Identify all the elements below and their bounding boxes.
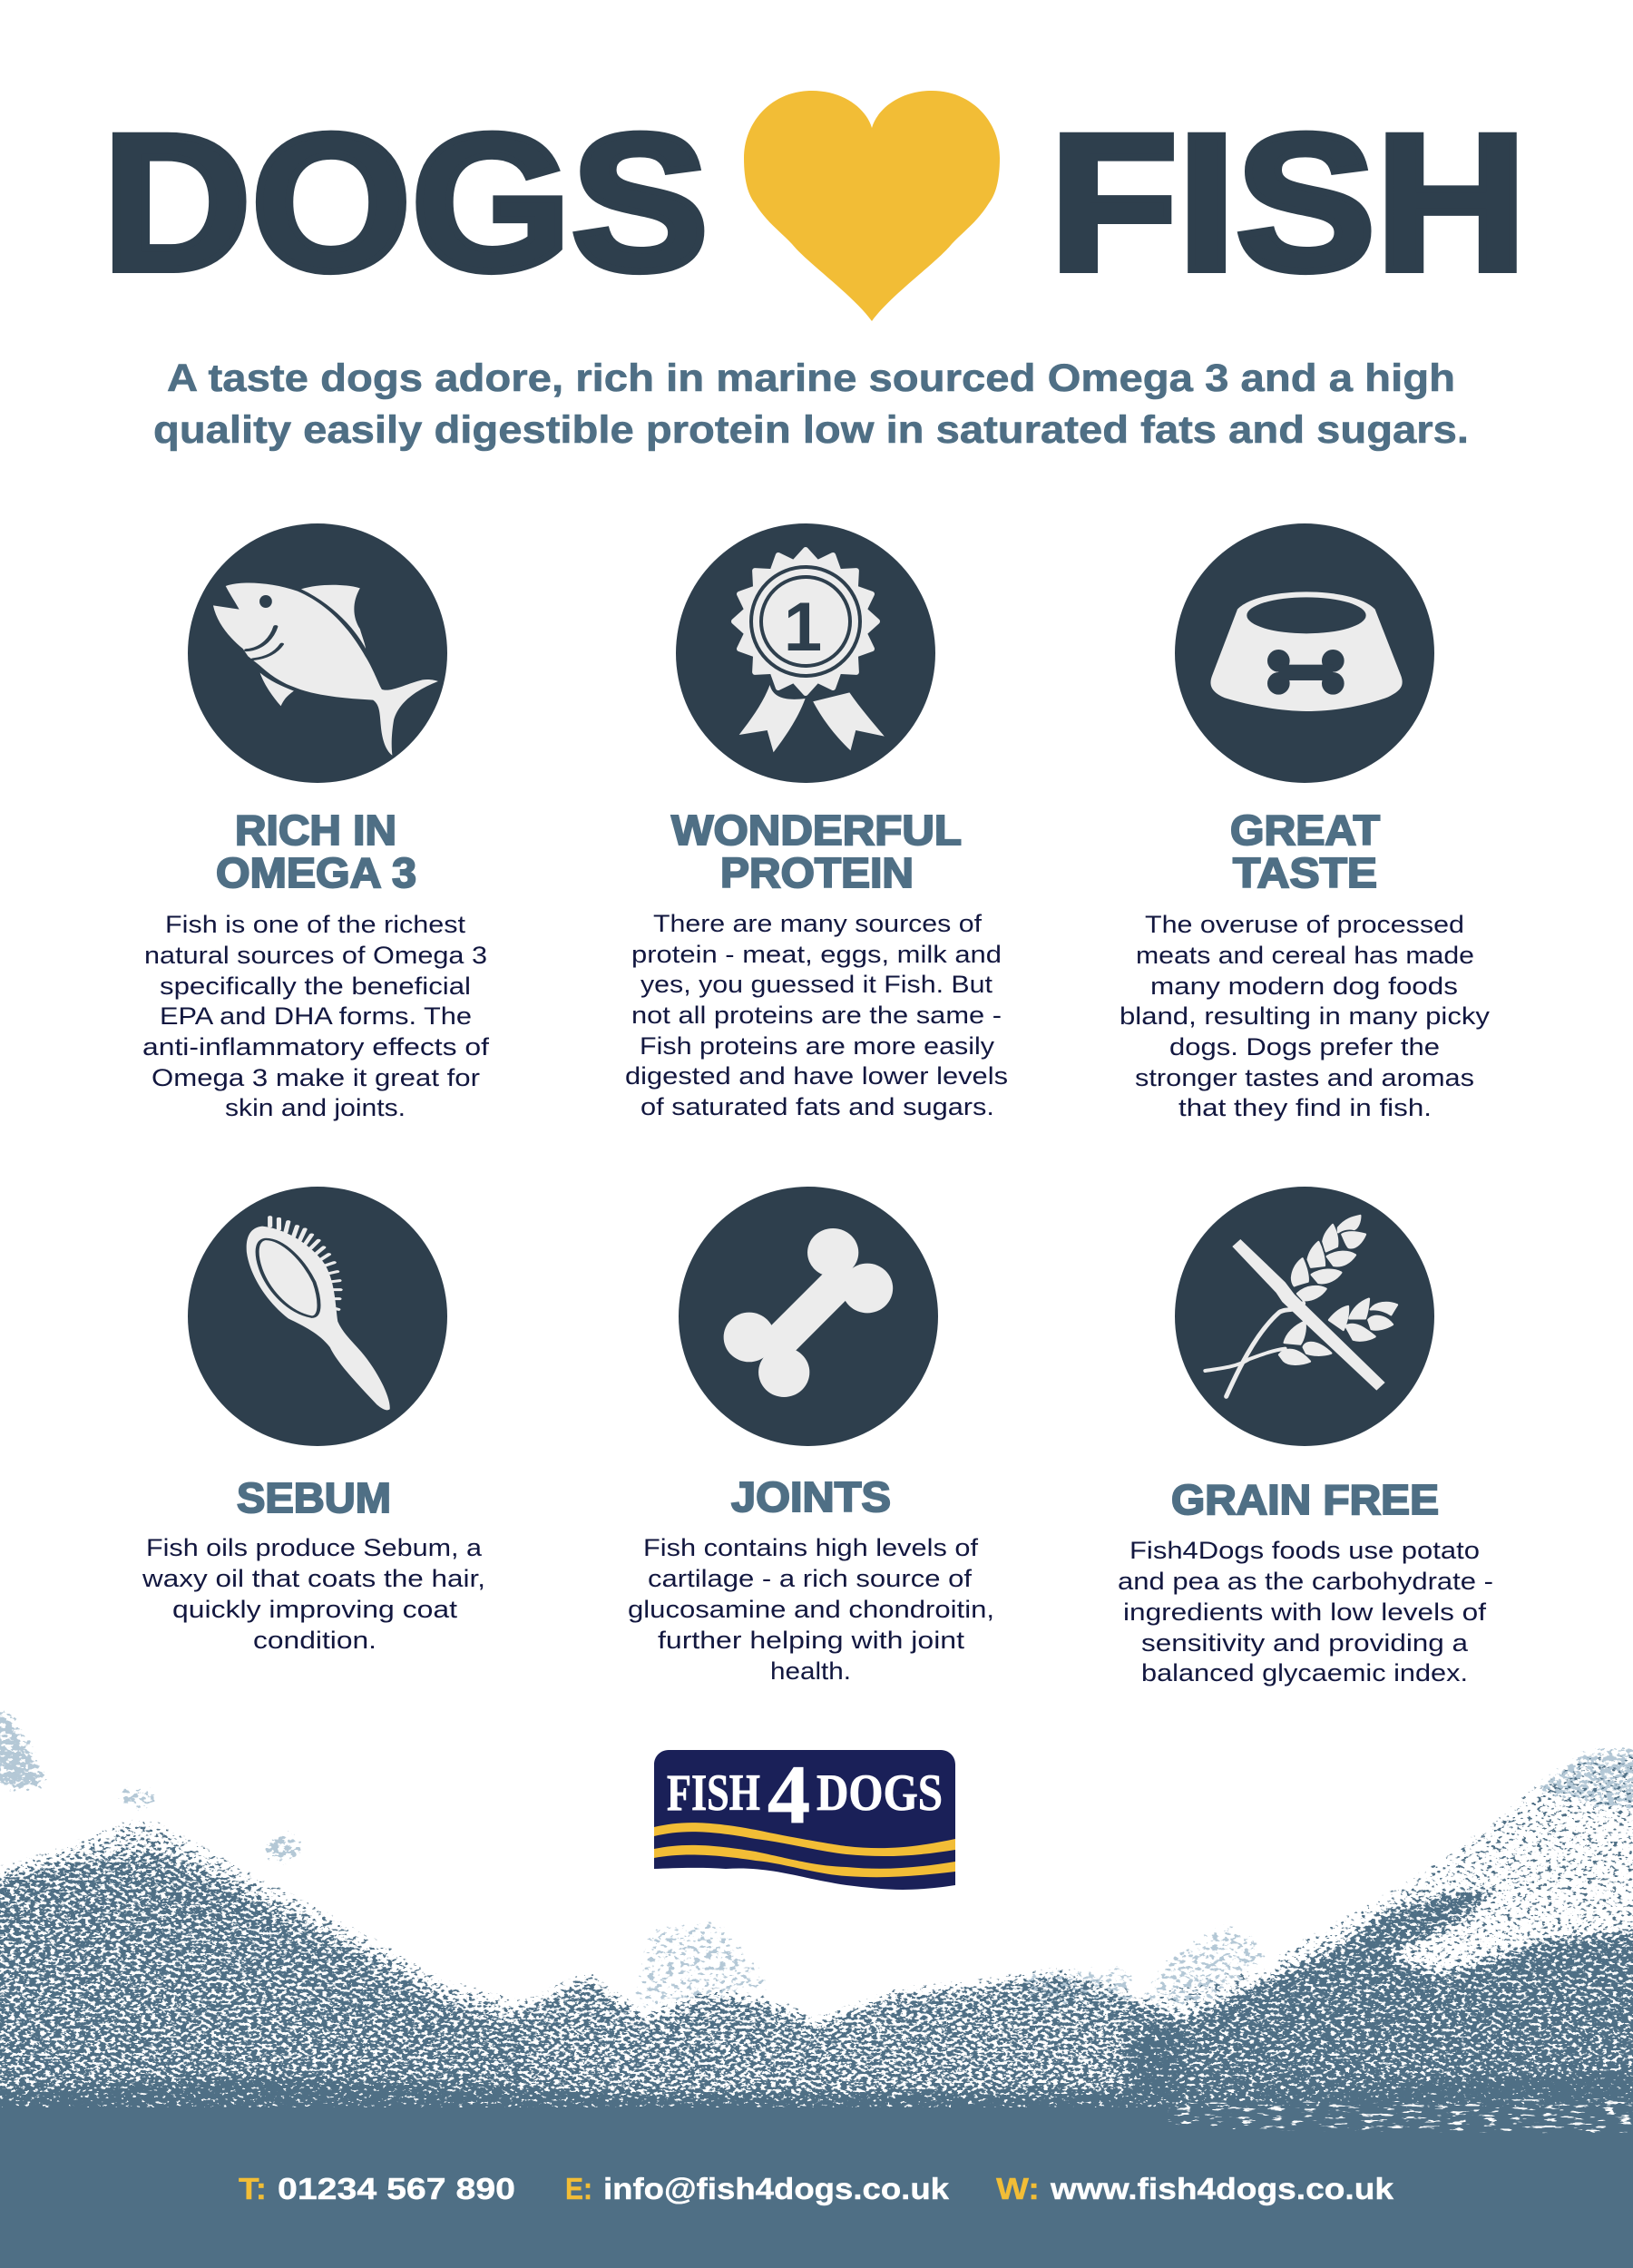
water speckles [1170, 2100, 1633, 2132]
panel: sebum [142, 1187, 485, 1654]
body text: taste: bland, resulting in many picky [1120, 1002, 1491, 1030]
body text: taste: The overuse of processed [1145, 911, 1464, 938]
body text: sebum [142, 1534, 485, 1654]
icon: fish [188, 523, 447, 783]
panel: rich in omega 3 [142, 523, 490, 1121]
body text: grain free: ingredients with low levels of [1123, 1598, 1487, 1626]
icon: dog bowl [1175, 523, 1434, 783]
subtitle: A taste dogs adore, rich in marine sourced Omega 3 and a high [167, 357, 1455, 400]
panel: grain free [1118, 1187, 1493, 1686]
body text: omega 3 [142, 911, 490, 1121]
logo: fish4dogs [654, 1748, 955, 1890]
body text: grain free: Fish4Dogs foods use potato [1129, 1537, 1480, 1564]
body text: taste: many modern dog foods [1150, 973, 1458, 1000]
panel: joints [628, 1187, 994, 1685]
body text: taste: dogs. Dogs prefer the [1169, 1033, 1440, 1061]
phone: 01234 567 890 [278, 2172, 515, 2205]
body text: sebum: quickly improving coat [172, 1596, 458, 1623]
body text: omega 3: specifically the beneficial [160, 973, 471, 1000]
body text: protein: protein - meat, eggs, milk and [631, 941, 1002, 968]
body text: omega 3: Fish is one of the richest [165, 911, 466, 938]
contact details [239, 2172, 1394, 2205]
body text: joints: glucosamine and chondroitin, [628, 1596, 994, 1623]
heading: rich in omega 3: OMEGA 3 [216, 849, 416, 896]
website: W: [996, 2172, 1040, 2205]
heading: great taste: GREAT [1230, 807, 1380, 854]
body text: protein: of saturated fats and sugars. [640, 1093, 994, 1120]
body text: grain free: balanced glycaemic index. [1141, 1659, 1468, 1686]
heading: rich in omega 3 [216, 807, 416, 896]
body text: omega 3: natural sources of Omega 3 [144, 942, 487, 969]
body text: protein [625, 910, 1008, 1120]
title: dogs heart fish [103, 91, 1527, 321]
body text: omega 3: anti-inflammatory effects of [142, 1033, 490, 1061]
icon: bone [679, 1187, 938, 1446]
heading: great taste: TASTE [1233, 849, 1377, 896]
body text: taste: that they find in fish. [1178, 1094, 1432, 1121]
email: info@fish4dogs.co.uk [603, 2172, 950, 2205]
panel: wonderful protein [625, 523, 1008, 1120]
website: www.fish4dogs.co.uk [1050, 2172, 1394, 2205]
body text: protein: digested and have lower levels [625, 1062, 1008, 1090]
body text: taste [1120, 911, 1491, 1121]
body text: taste: meats and cereal has made [1136, 942, 1474, 969]
body text: joints: Fish contains high levels of [643, 1534, 979, 1561]
phone: T: [239, 2172, 267, 2205]
body text: joints: cartilage - a rich source of [648, 1565, 973, 1592]
body text: omega 3: EPA and DHA forms. The [160, 1002, 472, 1030]
body text: grain free: and pea as the carbohydrate - [1118, 1568, 1493, 1595]
title word: DOGS: DOGS [103, 94, 709, 311]
footer band [0, 2107, 1633, 2268]
heading: sebum: SEBUM [237, 1474, 391, 1521]
body text: protein: yes, you guessed it Fish. But [640, 971, 993, 998]
heading: great taste [1230, 807, 1380, 896]
body text: omega 3: Omega 3 make it great for [152, 1064, 480, 1091]
icon: rosette [676, 523, 935, 783]
heading: wonderful protein: WONDERFUL [671, 807, 962, 854]
body text: sebum: condition. [253, 1627, 376, 1654]
icon: rosette: 1 [784, 589, 822, 666]
body text: taste: stronger tastes and aromas [1135, 1064, 1474, 1091]
body text: joints: further helping with joint [658, 1627, 965, 1654]
body text: protein: There are many sources of [653, 910, 983, 937]
body text: joints [628, 1534, 994, 1685]
heading: wonderful protein: PROTEIN [720, 849, 914, 896]
subtitle: quality easily digestible protein low in saturated fats and sugars. [153, 408, 1469, 452]
logo: fish4dogs: FISH [667, 1765, 760, 1822]
heading: rich in omega 3: RICH IN [235, 807, 396, 854]
body text: protein: not all proteins are the same - [631, 1002, 1002, 1029]
heading: wonderful protein [671, 807, 962, 896]
body text: sebum: waxy oil that coats the hair, [142, 1565, 485, 1592]
icon: hair brush [188, 1187, 447, 1446]
icon: yellow heart [744, 91, 1000, 321]
panel: great taste [1120, 523, 1491, 1121]
heading: joints: JOINTS [731, 1473, 891, 1520]
title word: FISH: FISH [1050, 94, 1527, 311]
body text: sebum: Fish oils produce Sebum, a [146, 1534, 483, 1561]
logo: fish4dogs: 4 [768, 1748, 810, 1841]
subtitle [153, 357, 1469, 452]
body text: joints: health. [770, 1657, 851, 1685]
logo: fish4dogs: DOGS [816, 1765, 943, 1822]
body text: grain free: sensitivity and providing a [1141, 1629, 1469, 1657]
email: E: [565, 2172, 592, 2205]
body text: protein: Fish proteins are more easily [640, 1032, 995, 1060]
heading: grain free: GRAIN FREE [1171, 1476, 1439, 1523]
body text: grain free [1118, 1537, 1493, 1686]
body text: omega 3: skin and joints. [225, 1094, 406, 1121]
mountain landscape [0, 1710, 1633, 2177]
icon: crossed-out wheat [1175, 1187, 1434, 1446]
